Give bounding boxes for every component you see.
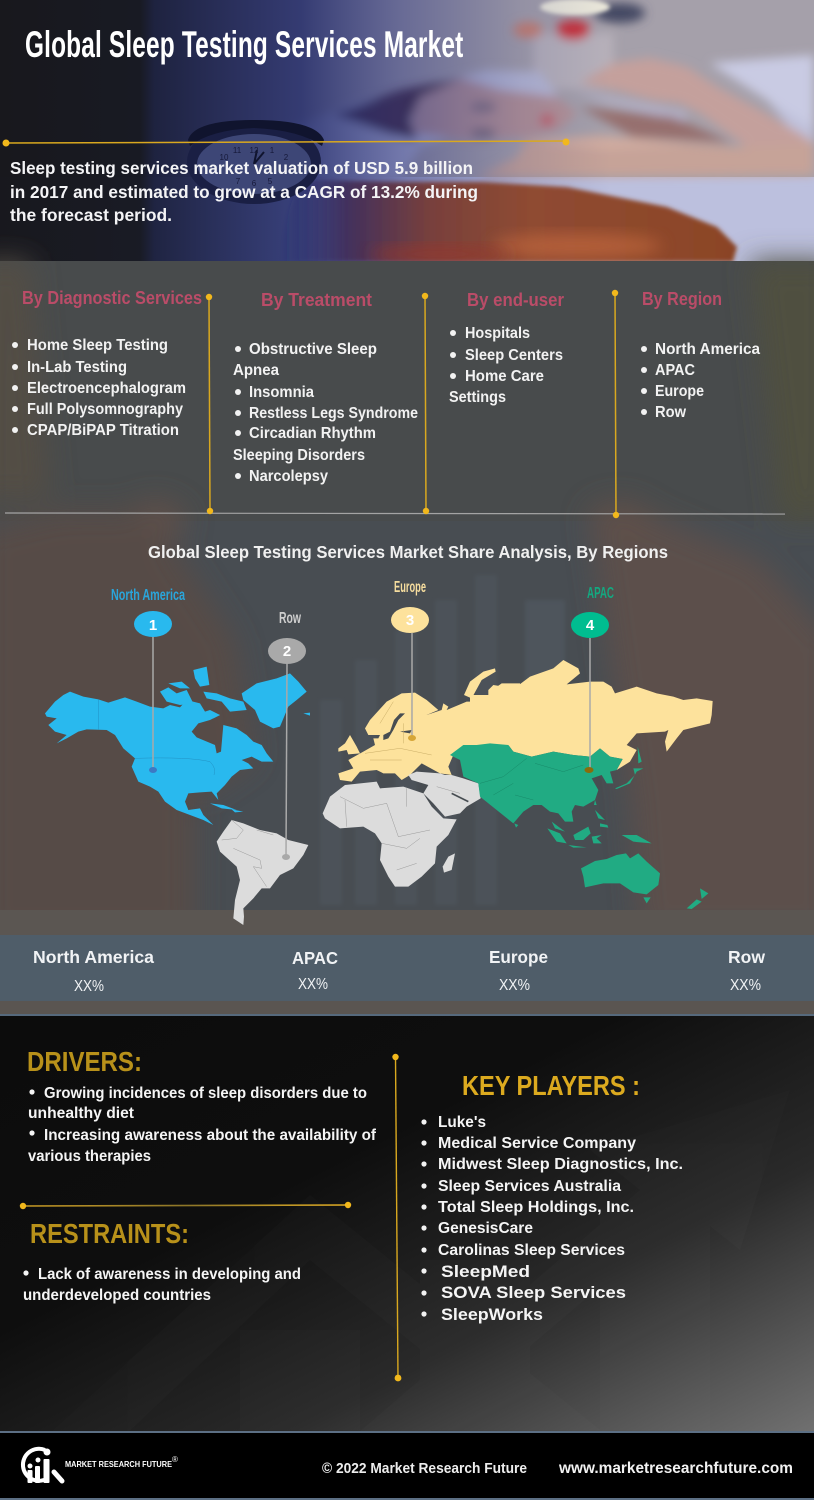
panel: regional share band: XX% [730,977,761,994]
panel: regional share band: XX% [74,978,104,995]
hero gold divider [2,138,570,146]
key players list: Total Sleep Holdings, Inc. [438,1199,634,1216]
region: africa and middle east [323,772,481,887]
drivers text [28,1085,377,1165]
column: by treatment: Narcolepsy [249,468,328,485]
alarm clock: 5 [268,177,273,186]
drivers text: various therapies [28,1148,151,1165]
heading: drivers: DRIVERS: [27,1046,142,1077]
bedside table [280,180,737,262]
key players list: GenesisCare [438,1220,533,1237]
intro text: the forecast period. [10,205,172,225]
intro text: Sleep testing services market valuation of USD 5.9 billion [10,158,473,178]
key players list: SleepWorks [441,1305,543,1324]
column: by diagnostic services: Electroencephalogram [27,380,186,397]
copyright: © 2022 Market Research Future [322,1460,527,1477]
alarm clock: 6 [252,179,257,188]
column separators [206,290,619,518]
column: by region: North America [655,341,760,358]
column: by treatment: Obstructive Sleep [249,341,377,358]
column: by treatment: Circadian Rhythm [249,425,376,442]
column: by diagnostic services [12,288,202,439]
alarm clock: 12 [250,146,259,155]
pin 3: europe [391,579,429,741]
column: by end-user [449,290,564,406]
key players list: Carolinas Sleep Services [438,1242,625,1259]
panel: regional share band [0,935,814,1014]
panel: footer [0,1431,814,1500]
column: by treatment: Insomnia [249,384,314,401]
panel: segmentation and map background [0,261,814,940]
pin 2: row [268,610,306,860]
heading: restraints: RESTRAINTS: [30,1218,189,1249]
panel: drivers, restraints and key players background [0,1014,814,1465]
logo: MARKET RESEARCH FUTURE [65,1460,173,1469]
drivers text: Increasing awareness about the availability of [44,1127,377,1144]
panel: regional share band: XX% [298,976,328,993]
column: by region: APAC [655,362,695,379]
vertical gold divider [392,1054,401,1381]
intro text: in 2017 and estimated to grow at a CAGR of 13.2% during [10,182,478,202]
column: by treatment [233,290,418,485]
key players list: Luke's [438,1114,486,1131]
pin 4: apac [571,585,614,773]
pin 3: europe: Europe [394,579,426,596]
column: by treatment: Restless Legs Syndrome [249,405,418,422]
key players list: Midwest Sleep Diagnostics, Inc. [438,1156,683,1173]
key players list: SOVA Sleep Services [441,1283,626,1302]
region: eastern russia [470,660,713,770]
gold divider: restraints [20,1202,351,1209]
column: by diagnostic services: CPAP/BiPAP Titration [27,422,179,439]
website: www.marketresearchfuture.com [558,1460,793,1477]
key players list [421,1114,683,1324]
column: by end-user: Hospitals [465,325,530,342]
alarm clock: 2 [284,153,289,162]
panel: regional share band: North America [33,947,154,967]
column: by region: Row [655,404,687,421]
map title: Global Sleep Testing Services Market Share Analysis, By Regions [148,542,668,562]
panel: regional share band: Europe [489,947,548,967]
restraints text: Lack of awareness in developing and [38,1266,301,1283]
restraints text [23,1266,301,1304]
pin 1: north america: North America [111,587,185,604]
pin 1: north america [111,587,185,773]
region: north america [45,667,310,825]
key players list: Sleep Services Australia [438,1178,621,1195]
column: by region [641,289,760,421]
pin 3: europe: 3 [406,612,414,629]
logo [23,1448,178,1483]
title: Global Sleep Testing Services Market [25,24,464,65]
column: by end-user: Settings [449,389,506,406]
region: south america [217,820,308,925]
column: by end-user: Sleep Centers [465,347,563,364]
column: by diagnostic services: By Diagnostic Services [22,288,202,308]
column: by treatment: Apnea [233,362,279,379]
logo: ® [172,1455,178,1464]
alarm clock: 1 [270,146,275,155]
intro text [10,158,478,225]
panel: hero photo [0,0,814,262]
key players list: Medical Service Company [438,1135,636,1152]
region: asia pacific [450,743,708,909]
column: by region: By Region [642,289,722,309]
left dark overlay [0,0,584,261]
pin 4: apac: APAC [587,585,614,602]
restraints text: underdeveloped countries [23,1287,211,1304]
column: by treatment: By Treatment [261,290,372,310]
pin 2: row: Row [279,610,301,627]
panel: regional share band: APAC [292,948,338,968]
column: by end-user: By end-user [467,290,564,310]
column: by end-user: Home Care [465,368,544,385]
pin 1: north america: 1 [149,617,157,634]
key players list: SleepMed [441,1262,530,1281]
heading: key players: KEY PLAYERS : [462,1070,640,1101]
panel: regional share band: XX% [499,977,530,994]
alarm clock: 11 [233,146,242,155]
alarm clock: 7 [236,177,241,186]
column: by diagnostic services: Full Polysomnography [27,401,183,418]
world map [45,660,713,925]
column: by treatment: Sleeping Disorders [233,447,365,464]
column: by region: Europe [655,383,704,400]
pin 4: apac: 4 [586,617,595,634]
panel: regional share band: Row [728,947,765,967]
region: europe and western russia [338,668,520,782]
drivers text: unhealthy diet [28,1105,134,1122]
alarm clock: 10 [220,153,229,162]
column: by diagnostic services: Home Sleep Testing [27,337,168,354]
drivers text: Growing incidences of sleep disorders due to [44,1085,367,1102]
column: by diagnostic services: In-Lab Testing [27,359,127,376]
alarm clock [187,120,324,204]
pin 2: row: 2 [283,643,291,660]
